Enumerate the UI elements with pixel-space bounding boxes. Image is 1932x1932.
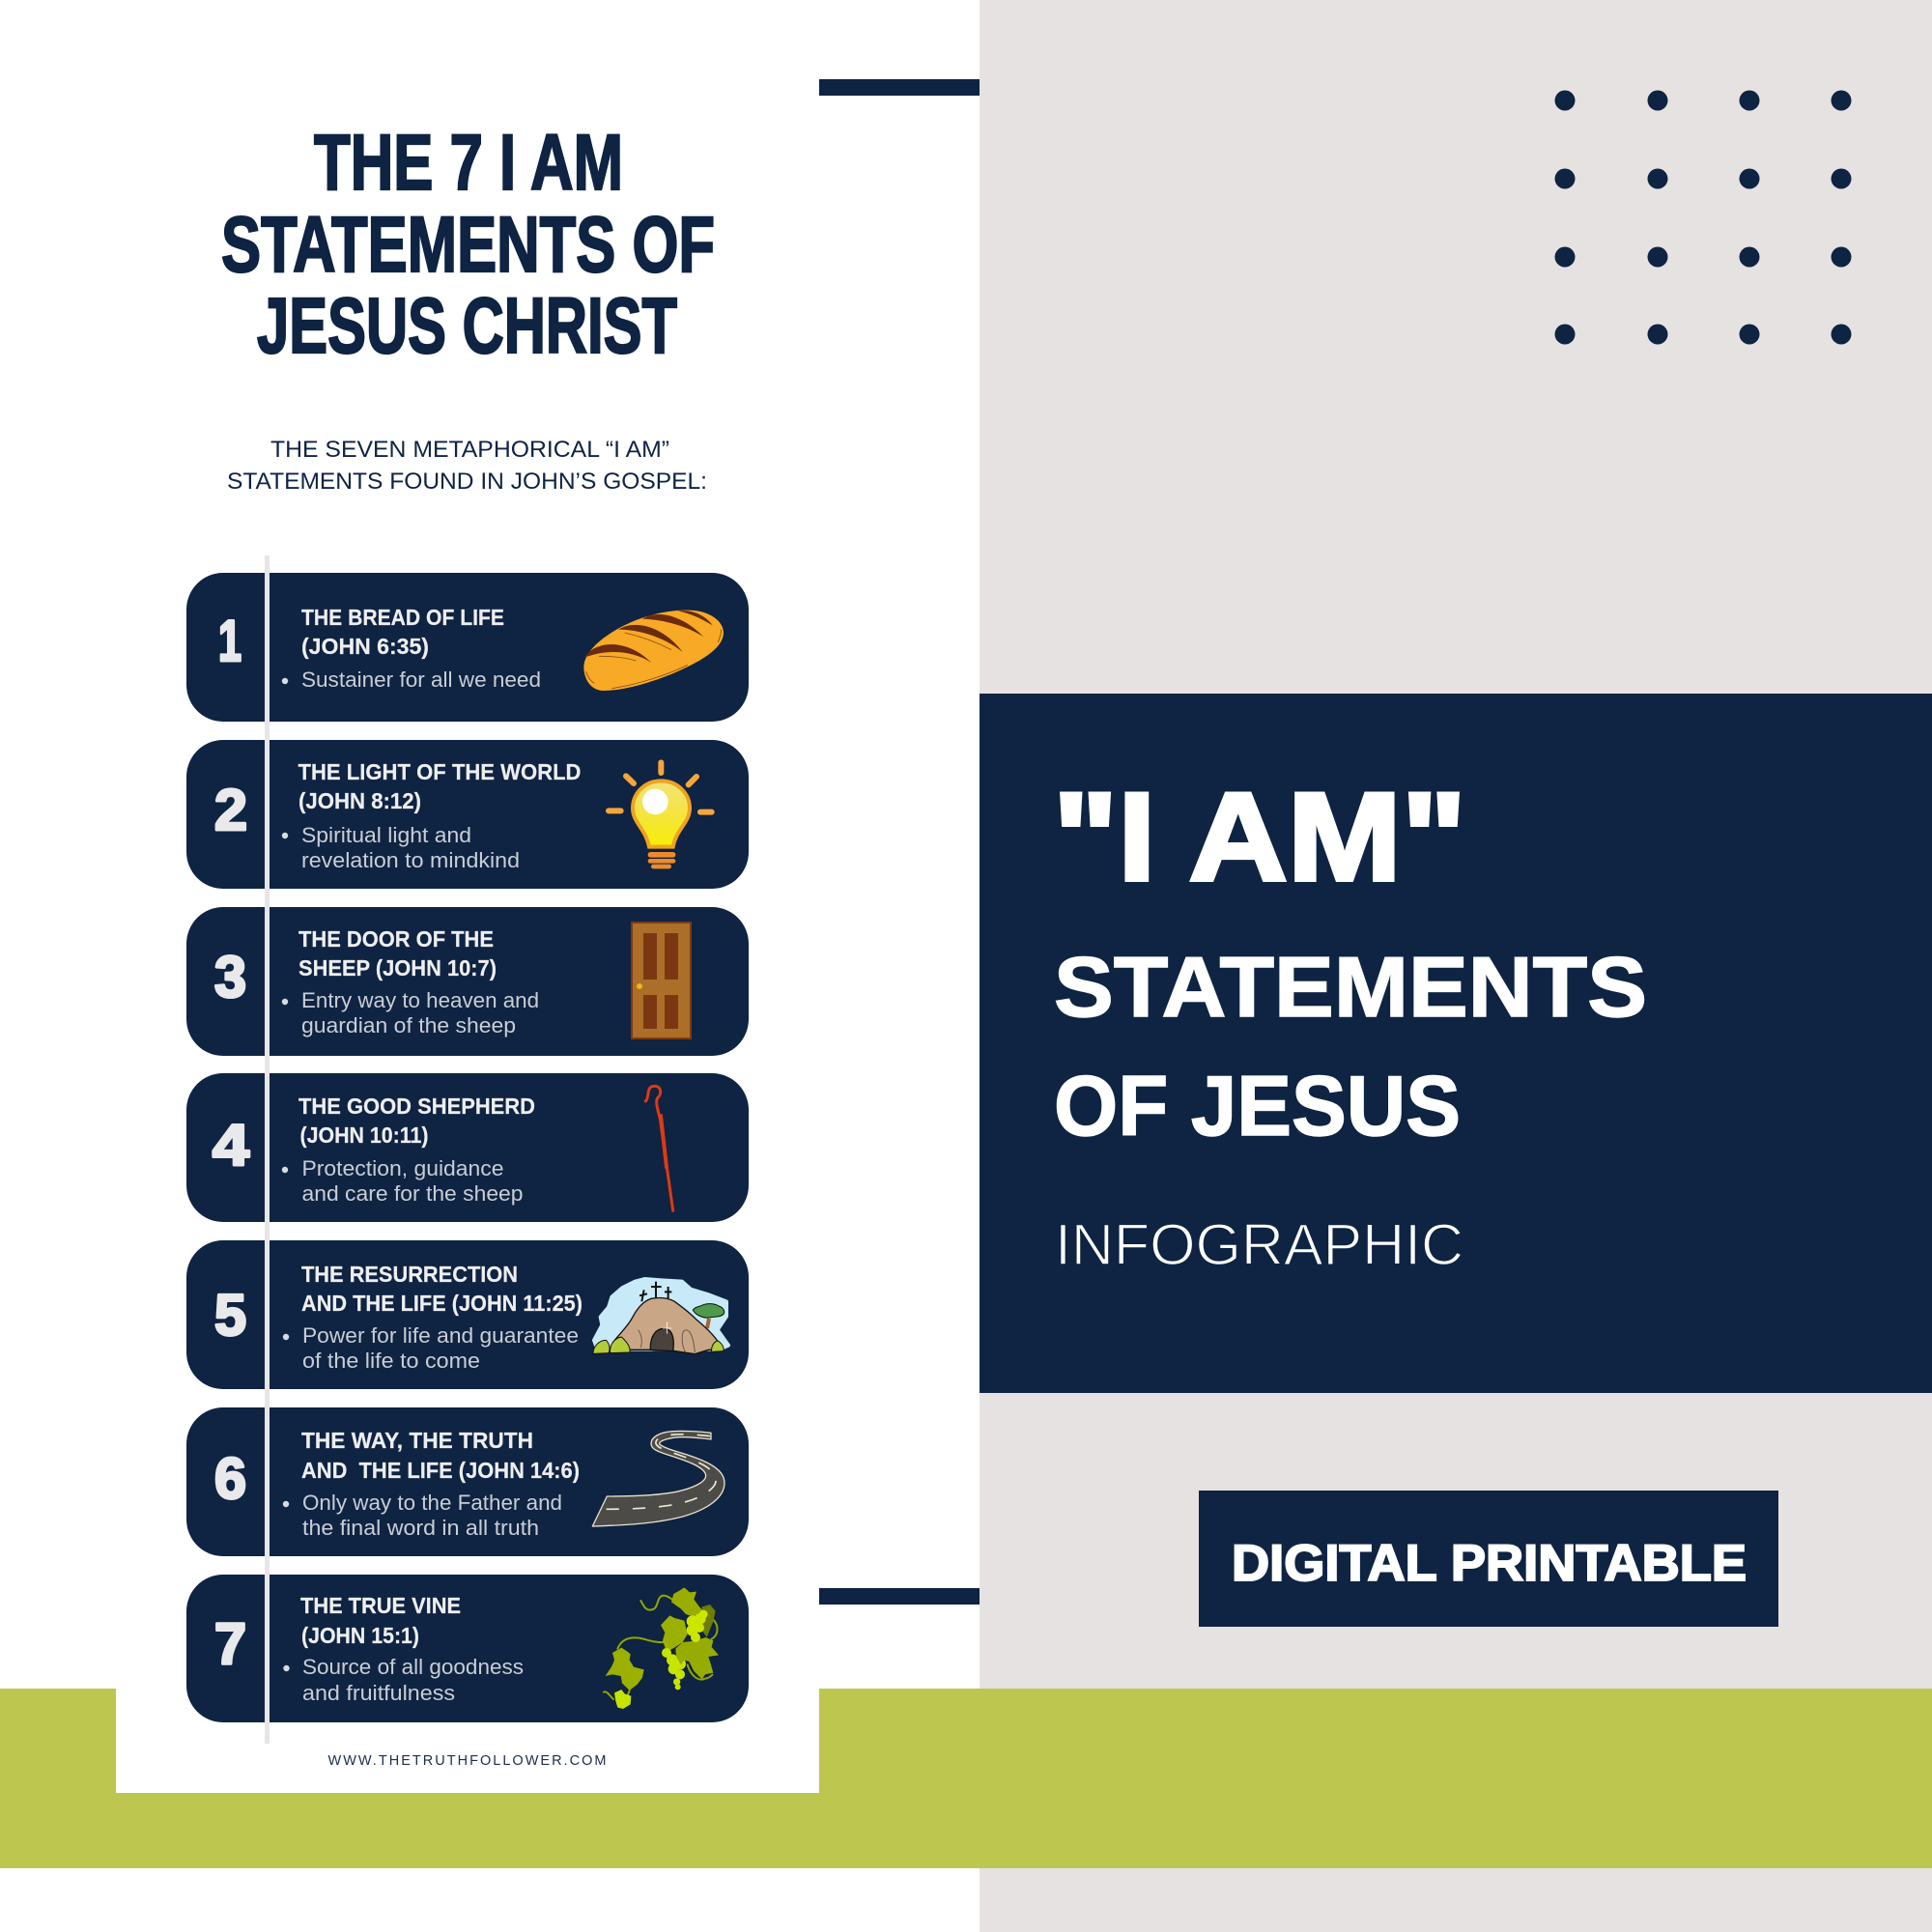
description 5: Power for life and guarantee (302, 1323, 579, 1348)
number 4: 4 (213, 1113, 250, 1178)
heading 6: THE WAY, THE TRUTH (301, 1428, 533, 1453)
description 6: Only way to the Father and (302, 1491, 562, 1515)
number 2: 2 (214, 778, 247, 842)
panel: statement 5 (186, 1240, 749, 1389)
description 7: Source of all goodness (302, 1655, 524, 1679)
website url: WWW.THETRUTHFOLLOWER.COM (328, 1753, 607, 1769)
icon: bread (583, 611, 724, 691)
heading 2: (JOHN 8:12) (298, 788, 421, 813)
heading 3: SHEEP (JOHN 10:7) (298, 955, 497, 980)
heading: I AM: "I AM" (1053, 766, 1466, 907)
icon: winding road (592, 1431, 724, 1526)
description 4 (282, 1156, 524, 1206)
description 2: revelation to mindkind (301, 848, 520, 872)
icon: empty tomb (593, 1279, 728, 1354)
icon: light bulb (609, 762, 712, 868)
heading 7: (JOHN 15:1) (301, 1623, 419, 1648)
description 6: the final word in all truth (302, 1516, 539, 1540)
heading 7 (300, 1593, 461, 1648)
panel: navy title block (980, 694, 1932, 1393)
description 7: and fruitfulness (302, 1681, 455, 1705)
description 4: and care for the sheep (301, 1181, 524, 1206)
top accent bar (819, 79, 980, 96)
subtitle (227, 437, 707, 495)
number 3: 3 (214, 945, 246, 1009)
badge: digital printable: DIGITAL PRINTABLE (1232, 1535, 1747, 1592)
heading 3: THE DOOR OF THE (298, 926, 494, 952)
icon: grape vine (604, 1587, 719, 1709)
heading 1 (301, 605, 504, 659)
description 2 (282, 823, 520, 872)
heading 5: THE RESURRECTION (301, 1262, 518, 1287)
heading 2: THE LIGHT OF THE WORLD (298, 759, 582, 784)
title: STATEMENTS OF (221, 201, 715, 289)
title: JESUS CHRIST (257, 282, 677, 370)
green band (0, 1689, 1932, 1868)
heading 1: (JOHN 6:35) (301, 634, 429, 659)
number 1: 1 (218, 609, 242, 673)
heading 6 (301, 1428, 580, 1483)
icon: door (632, 923, 691, 1038)
badge: digital printable (1199, 1491, 1778, 1627)
timeline vertical line (265, 555, 270, 1744)
right grey background (980, 0, 1932, 1932)
number 7: 7 (214, 1611, 246, 1676)
description 7 (283, 1655, 524, 1705)
panel: statement 7 (186, 1575, 749, 1722)
description 3: guardian of the sheep (301, 1013, 516, 1037)
panel: statement 2 (186, 740, 749, 889)
panel: statement 4 (186, 1073, 749, 1222)
white infographic sheet (116, 0, 819, 1793)
description 3: Entry way to heaven and (301, 988, 539, 1012)
description 2: Spiritual light and (301, 823, 471, 847)
heading 5 (301, 1262, 582, 1316)
dot grid (1555, 91, 1851, 344)
subtitle: THE SEVEN METAPHORICAL “I AM” (270, 437, 669, 463)
heading 6: AND THE LIFE (JOHN 14:6) (301, 1458, 580, 1483)
heading: statements of jesus: STATEMENTS (1054, 939, 1647, 1035)
heading: statements of jesus (1054, 939, 1647, 1153)
panel: statement 1 (186, 573, 749, 722)
heading 5: AND THE LIFE (JOHN 11:25) (301, 1291, 582, 1316)
number 5: 5 (214, 1283, 246, 1348)
heading 4: THE GOOD SHEPHERD (298, 1094, 535, 1119)
heading: statements of jesus: OF JESUS (1054, 1058, 1461, 1153)
title (221, 119, 715, 370)
icon: shepherd's crook (645, 1086, 673, 1210)
description 4: Protection, guidance (301, 1156, 504, 1180)
description 1: Sustainer for all we need (301, 668, 541, 692)
heading 4: (JOHN 10:11) (299, 1122, 429, 1148)
heading 1: THE BREAD OF LIFE (301, 605, 504, 630)
heading 4 (298, 1094, 535, 1148)
subtitle: STATEMENTS FOUND IN JOHN’S GOSPEL: (227, 469, 707, 495)
description 3 (282, 988, 539, 1037)
panel: statement 3 (186, 907, 749, 1056)
panel: statement 6 (186, 1407, 749, 1556)
left white background (0, 0, 980, 1932)
title: THE 7 I AM (314, 119, 623, 207)
subheading: infographic: INFOGRAPHIC (1055, 1212, 1463, 1277)
description 5 (283, 1323, 579, 1373)
heading 7: THE TRUE VINE (300, 1593, 461, 1618)
description 6 (283, 1491, 562, 1540)
bottom accent bar (819, 1588, 980, 1605)
heading 2 (298, 759, 582, 813)
description 5: of the life to come (302, 1349, 480, 1373)
heading 3 (298, 926, 497, 980)
number 6: 6 (214, 1446, 246, 1511)
